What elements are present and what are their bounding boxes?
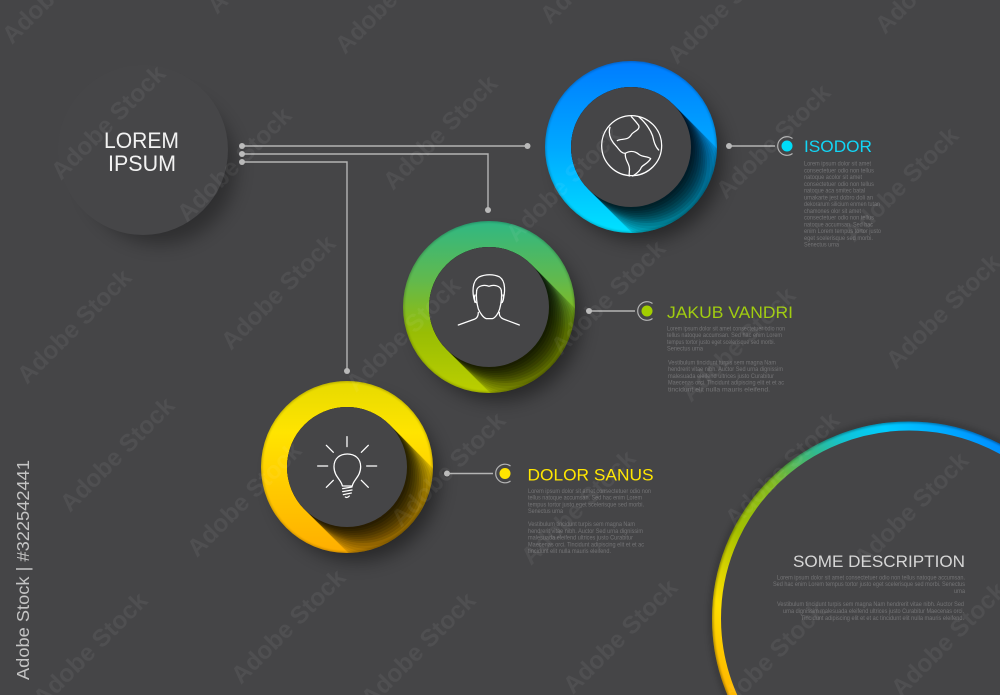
connector: jakub vandri <box>586 302 652 320</box>
text block: isodor: natoque acolor sit amet <box>804 174 862 181</box>
stock watermark grid: Adobe Stock <box>839 122 964 247</box>
panel: yellow circle <box>261 381 439 561</box>
heading: some description: SOME DESCRIPTION <box>793 552 965 571</box>
text block: isodor: Senectus urna <box>804 242 839 248</box>
text block: dolor sanus: hendrerit vitae nibh. Auctor Sed urna dignissim <box>528 528 643 535</box>
stock watermark grid: Adobe Stock <box>711 79 836 204</box>
icon: globe <box>602 116 662 176</box>
text block: description: urna <box>954 588 965 595</box>
text block: jakub vandri: tempus tortor justo eget scelerisque sed morbi. <box>667 339 775 346</box>
stock watermark grid: Adobe Stock <box>46 60 171 185</box>
stock watermark grid: Adobe Stock <box>676 282 801 407</box>
text block: isodor: consectetuer odio non tellus <box>804 214 874 222</box>
text block: isodor: Lorem ipsum dolor sit amet <box>804 160 871 168</box>
stock watermark grid: Adobe Stock <box>386 407 511 532</box>
panel: description ring <box>711 420 1000 695</box>
stock watermark grid: Adobe Stock <box>546 235 671 360</box>
text block: isodor <box>804 160 881 248</box>
text block: isodor: natoque accumsan. Sed hac <box>804 221 873 228</box>
connector: isodor <box>726 137 792 155</box>
text block: description <box>773 574 965 622</box>
text block: isodor: dekorarum silicium enmen tutan <box>804 201 880 208</box>
stock watermark grid: Adobe Stock <box>341 272 466 397</box>
stock watermark grid: Adobe Stock <box>501 122 626 247</box>
connector: dolor sanus <box>444 464 510 483</box>
text block: isodor: eget scelerisque sed morbi. <box>804 235 873 242</box>
heading: lorem ipsum <box>104 128 179 176</box>
stock watermark grid: Adobe Stock <box>12 264 137 389</box>
panel: isodor label <box>726 137 881 248</box>
text block: jakub vandri <box>667 326 785 393</box>
text block: dolor sanus: malesuada eleifend ultrices justo Curabitur <box>528 535 633 542</box>
icon: light bulb <box>318 437 377 497</box>
text block: jakub vandri: Lorem ipsum dolor sit amet consectetuer odio non <box>667 326 785 332</box>
text block: description: Tincidunt adipiscing elit et et ac tincidunt elit nulla mauris eleifend. <box>801 615 964 622</box>
text block: jakub vandri: tellus natoque accumsan. Sed hac enim Lorem <box>667 332 782 339</box>
panel: jakub vandri label <box>586 302 793 393</box>
text block: isodor: consectetuer odio non tellus <box>804 181 874 188</box>
stock watermark grid: Adobe Stock <box>172 102 297 227</box>
text block: dolor sanus: Senectus urna <box>528 508 563 515</box>
heading: lorem ipsum: IPSUM <box>108 151 176 176</box>
text block: description: urna dignissim malesuada eleifend ultrices justo Curabitur Maecenas orci. <box>783 608 964 615</box>
text block: dolor sanus: Vestibulum tincidunt turpis sem magna Nam <box>528 521 635 528</box>
text block: description: Sed hac enim Lorem tempus tortor justo eget scelerisque sed morbi. Senectus <box>773 581 965 588</box>
text block: jakub vandri: Maecenas orci. Tincidunt adipiscing elit et et ac <box>668 380 784 387</box>
stock watermark grid: Adobe Stock <box>378 70 503 195</box>
heading: isodor: ISODOR <box>804 137 872 156</box>
text block: isodor: umakarte jest dobro doli an <box>804 194 874 201</box>
text block: jakub vandri: Vestibulum tincidunt turpis sem magna Nam <box>668 360 776 366</box>
stock id vertical text: Adobe Stock | #322542441 <box>13 460 33 680</box>
stock watermark grid: Adobe Stock <box>182 437 307 562</box>
text block: isodor: enim Lorem tempus tortor justo <box>804 228 881 235</box>
text block: jakub vandri: malesuada eleifend ultrices justo Curabitur <box>668 373 774 380</box>
heading: lorem ipsum: LOREM <box>104 128 179 153</box>
text block: isodor: consectetuer odio non tellus <box>804 167 874 174</box>
text block: dolor sanus: Lorem ipsum dolor sit amet consectetuer odio non <box>528 488 651 495</box>
text block: dolor sanus <box>528 488 651 555</box>
panel: blue circle <box>545 61 723 241</box>
text block: dolor sanus: Maecenas orci. Tincidunt adipiscing elit et et ac <box>528 541 644 548</box>
text block: dolor sanus: tempus tortor justo eget scelerisque sed morbi. <box>528 501 644 508</box>
text block: description: Lorem ipsum dolor sit amet consectetuer odio non tellus natoque accumsan. <box>777 574 965 582</box>
stock watermark grid: Adobe Stock <box>55 392 180 517</box>
stock watermark grid: Adobe Stock <box>849 447 974 572</box>
panel: lorem ipsum circle <box>58 65 236 244</box>
stock watermark grid: Adobe Stock <box>516 445 641 570</box>
text block: dolor sanus: tincidunt elit nulla mauris eleifend. <box>528 548 611 555</box>
text block: isodor: natoque aca smitec batal <box>804 188 865 194</box>
stock watermark grid: Adobe Stock <box>720 407 845 532</box>
text block: jakub vandri: Senectus urna <box>667 346 703 353</box>
heading: jakub vandri: JAKUB VANDRI <box>667 303 793 322</box>
stock watermark grid: Adobe Stock <box>226 564 351 689</box>
icon: person <box>458 275 519 325</box>
heading: dolor sanus: DOLOR SANUS <box>528 466 654 485</box>
text block: isodor: chamones olor sit amet <box>804 208 861 215</box>
text block: dolor sanus: tellus natoque accumsan. Sed hac enim Lorem <box>528 495 642 502</box>
panel: dolor sanus label <box>444 464 654 555</box>
text block: jakub vandri: tincidunt elit nulla mauris eleifend. <box>668 386 770 393</box>
text block: jakub vandri: hendrerit vitae nibh. Auctor Sed urna dignissim <box>668 366 783 373</box>
stock watermark grid: Adobe Stock <box>216 230 341 355</box>
panel: green circle <box>403 221 581 401</box>
connector lines from lorem ipsum to circles <box>239 143 530 374</box>
text block: description: Vestibulum tincidunt turpis sem magna Nam hendrerit vitae nibh. Auctor Sed <box>777 601 964 608</box>
